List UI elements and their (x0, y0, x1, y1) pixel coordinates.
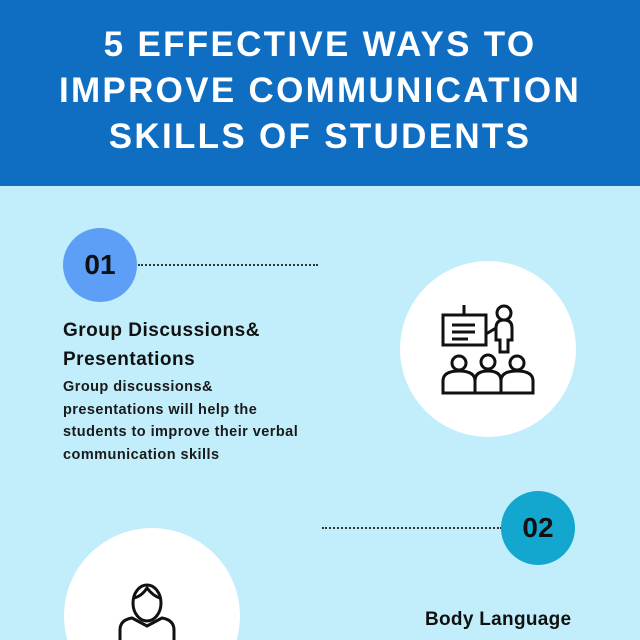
dotted connector 1 (138, 264, 318, 266)
header (0, 0, 640, 186)
dotted connector 2 (322, 527, 502, 529)
title: SKILLS OF STUDENTS (109, 117, 531, 156)
badge 01: 01 (84, 249, 116, 280)
title: 5 EFFECTIVE WAYS TO (104, 25, 536, 64)
heading 1: Presentations (63, 349, 195, 370)
body text 1: Group discussions& (63, 379, 213, 395)
body text 1 (63, 379, 298, 462)
badge 02: 02 (522, 512, 554, 543)
heading 1: Group Discussions& (63, 320, 260, 341)
title: IMPROVE COMMUNICATION (59, 71, 581, 110)
badge 01 (63, 228, 137, 302)
badge 02 (501, 491, 575, 565)
heading 1 (63, 320, 260, 370)
heading 2: Body Language (425, 609, 571, 630)
body text 1: students to improve their verbal (63, 424, 298, 440)
title (59, 25, 581, 156)
body text 1: presentations will help the (63, 402, 257, 418)
icon circle: presentation (400, 261, 576, 437)
body text 1: communication skills (63, 446, 219, 462)
icon circle: person (64, 528, 240, 640)
